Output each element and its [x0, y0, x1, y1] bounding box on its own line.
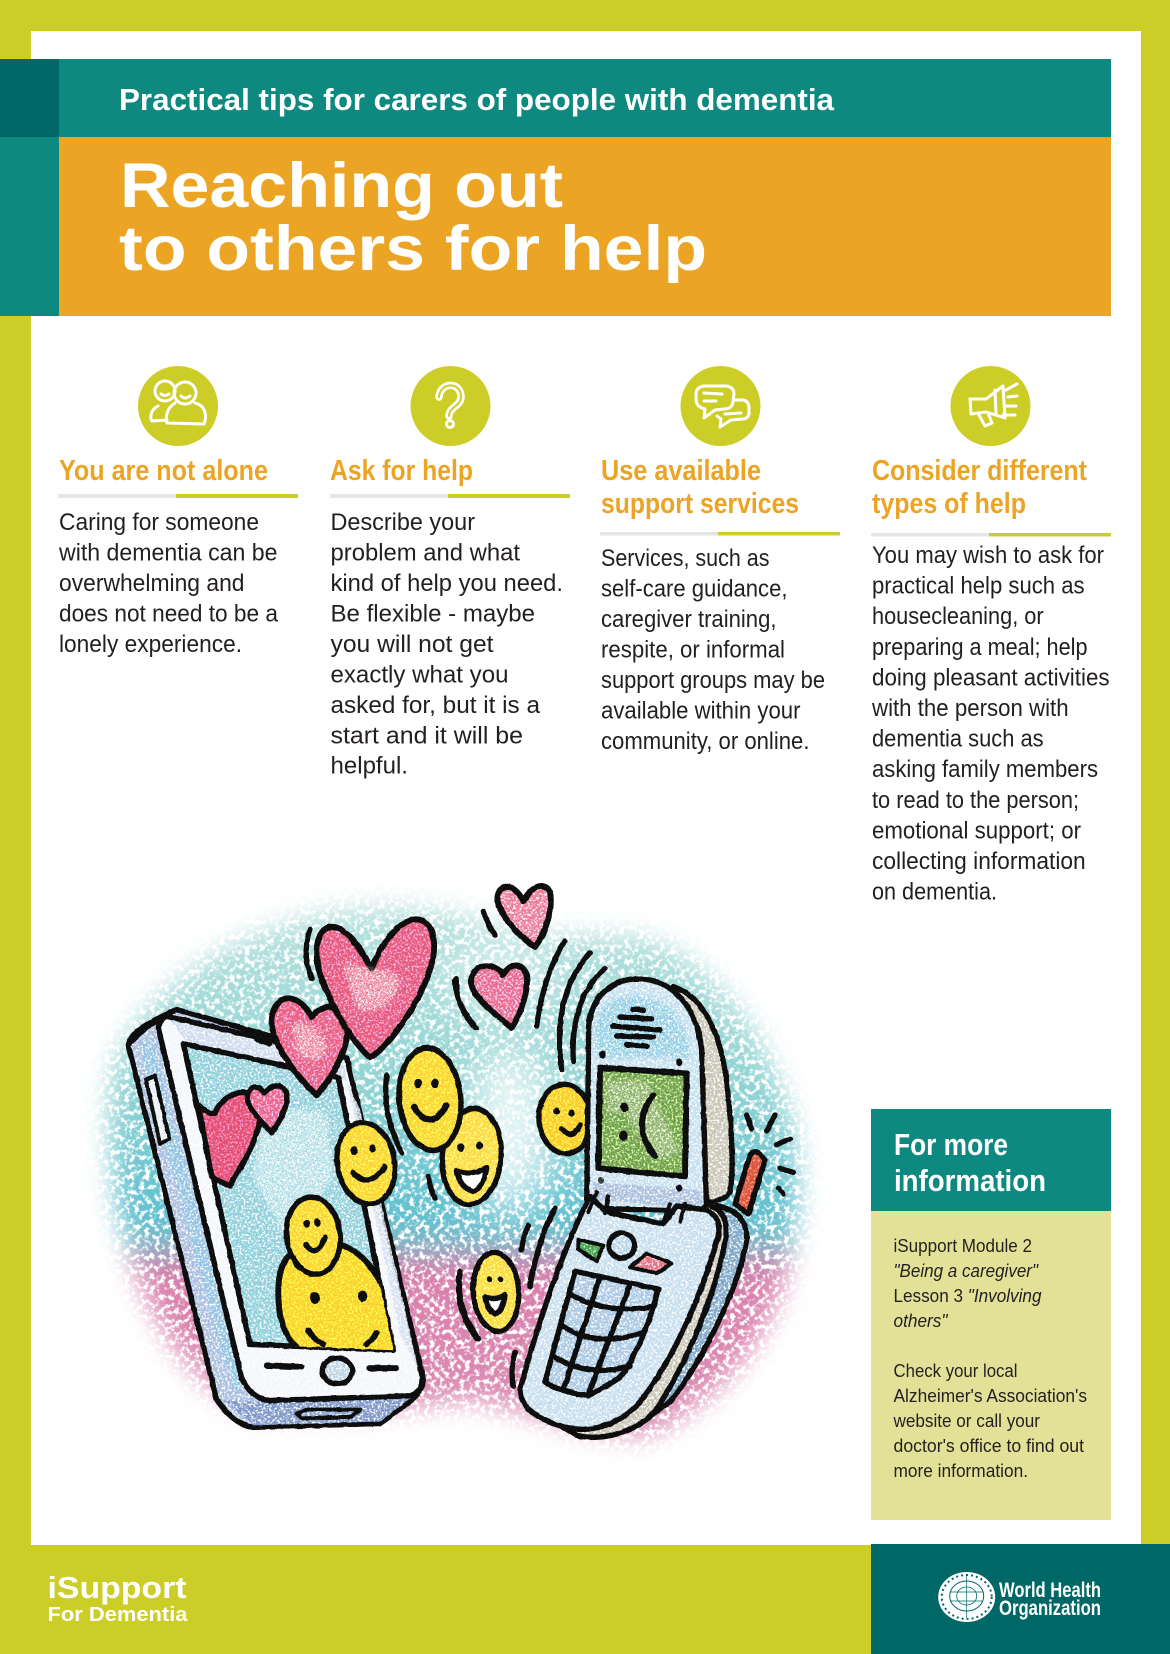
heading: [601, 455, 799, 520]
body text: overwhelming and: [59, 570, 244, 597]
heading: Use available: [601, 455, 761, 487]
panel text: doctor's office to find out: [894, 1435, 1084, 1456]
icon: question mark: [410, 366, 490, 446]
body text: collecting information: [872, 848, 1086, 875]
panel text: [871, 1211, 1111, 1520]
body text: available within your: [601, 698, 800, 724]
body text: support groups may be: [601, 667, 825, 694]
body text: caregiver training,: [601, 606, 776, 633]
small heart on screen: [247, 1086, 287, 1133]
repaint smiley 2 over smiley 3: [394, 1043, 466, 1155]
panel: use available support services: [600, 366, 840, 755]
body text: exactly what you: [330, 662, 508, 688]
flip phone buttons and keypad: [545, 1233, 672, 1396]
footer: World Health Organization: World Health: [999, 1579, 1101, 1602]
heart 3: [497, 886, 551, 947]
body text: with the person with: [871, 695, 1069, 722]
body text: Be flexible - maybe: [330, 600, 535, 628]
motion strokes: [306, 929, 478, 1338]
antenna ring lines: [747, 1115, 793, 1194]
body text: preparing a meal; help: [872, 634, 1088, 661]
panel text: Check your local: [894, 1360, 1018, 1381]
body text: emotional support; or: [872, 817, 1081, 844]
panel text: website or call your: [893, 1410, 1040, 1431]
body text: problem and what: [330, 540, 520, 566]
smiley 3 (laughing): [437, 1104, 506, 1209]
motion strokes: [455, 911, 605, 1386]
heart on screen: [198, 1092, 259, 1186]
heading: [872, 455, 1087, 520]
panel: consider different types of help: [871, 366, 1111, 906]
heading: types of help: [872, 488, 1026, 520]
body text: self-care guidance,: [601, 576, 788, 602]
panel text: iSupport Module 2: [894, 1235, 1032, 1256]
body text: asked for, but it is a: [330, 692, 540, 719]
body text: [58, 509, 278, 658]
body text: You may wish to ask for: [872, 542, 1104, 569]
body text: dementia such as: [872, 726, 1044, 753]
footer: World Health Organization: Organization: [999, 1597, 1101, 1620]
heading: Consider different: [872, 455, 1087, 487]
panel heading: For more: [894, 1127, 1008, 1162]
body text: doing pleasant activities: [872, 664, 1110, 691]
body text: lonely experience.: [59, 631, 242, 658]
body text: Caring for someone: [59, 509, 259, 536]
panel heading: information: [894, 1163, 1046, 1198]
smiley 2: [394, 1043, 466, 1155]
panel: for more information: [871, 1109, 1111, 1520]
body text: community, or online.: [601, 728, 810, 755]
icon: two smiling people: [138, 366, 218, 446]
heading: support services: [601, 488, 799, 520]
illustration: phones exchanging hearts and smileys: [109, 886, 798, 1437]
body text: with dementia can be: [58, 540, 278, 566]
panel text: "Being a caregiver": [894, 1260, 1039, 1281]
body text: Describe your: [330, 509, 475, 536]
body text: [871, 542, 1110, 906]
body text: kind of help you need.: [330, 570, 563, 597]
heading: You are not alone: [59, 455, 268, 487]
smartphone screen: [183, 1044, 393, 1350]
heart 2: [317, 919, 434, 1058]
smiley 1: [328, 1113, 404, 1213]
phone details: speaker, home button, port, side button: [146, 1040, 396, 1418]
footer logo: iSupport for Dementia: iSupport: [48, 1570, 186, 1605]
flip phone antenna: [735, 1152, 765, 1214]
body text: helpful.: [330, 752, 408, 780]
icon: WHO emblem: [938, 1572, 995, 1622]
panel text: others": [894, 1310, 949, 1331]
title band: to others for help: [119, 214, 707, 284]
big smiley on screen: [278, 1246, 400, 1358]
flip phone base: [520, 1192, 747, 1437]
flip phone screen with sad face: [598, 1068, 687, 1176]
icon: speech bubbles: [680, 366, 760, 446]
heading: Ask for help: [330, 455, 473, 487]
panel: you are not alone: [58, 366, 298, 658]
background: chalk colour cloud: [109, 907, 798, 1436]
header band: subtitle: Practical tips for carers of people with dementia: [119, 82, 835, 117]
panel heading: [871, 1109, 1111, 1211]
panel text: Lesson 3 "Involving: [894, 1285, 1042, 1306]
footer: World Health Organization: [871, 1544, 1170, 1654]
title band: [0, 137, 1111, 316]
footer logo: iSupport for Dementia: [48, 1570, 188, 1626]
second smiley group and flip phone: [394, 886, 793, 1437]
header band: subtitle: [0, 59, 1111, 137]
body text: [330, 509, 563, 780]
smiley 5: [470, 1250, 522, 1334]
heart 4: [471, 965, 527, 1028]
body text: housecleaning, or: [872, 603, 1044, 630]
panel text: Alzheimer's Association's: [894, 1385, 1087, 1406]
heart 1: [271, 998, 347, 1095]
body text: practical help such as: [872, 573, 1085, 600]
body text: respite, or informal: [601, 636, 785, 664]
icon: megaphone: [950, 366, 1030, 446]
body text: to read to the person;: [872, 787, 1079, 814]
body text: you will not get: [330, 631, 494, 658]
panel text: more information.: [894, 1460, 1028, 1481]
body text: does not need to be a: [59, 600, 278, 628]
smartphone: [128, 1009, 423, 1427]
body text: start and it will be: [330, 722, 523, 750]
flip phone lid: [587, 979, 732, 1212]
smiley 4: [534, 1079, 596, 1159]
body text: on dementia.: [872, 879, 997, 906]
flying hearts and smileys: [271, 919, 478, 1338]
footer logo: iSupport for Dementia: For Dementia: [48, 1604, 188, 1626]
body text: Services, such as: [601, 545, 770, 572]
body text: [601, 545, 825, 755]
small smiley on screen: [280, 1191, 346, 1280]
title band: Reaching out: [120, 151, 563, 221]
body text: asking family members: [872, 756, 1098, 783]
panel: ask for help: [330, 366, 570, 780]
